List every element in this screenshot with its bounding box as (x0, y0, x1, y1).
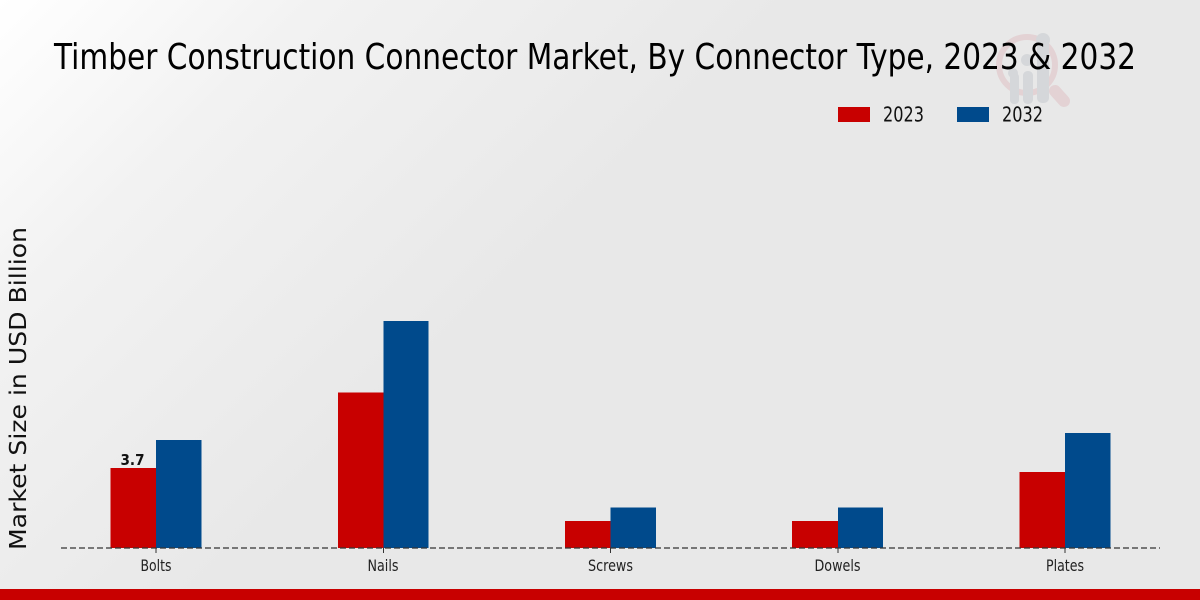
bars: Nails (338, 321, 428, 548)
x-axis labels: Screws (588, 556, 633, 575)
bars: Dowels (792, 508, 883, 548)
x-axis labels: Plates (1046, 556, 1084, 575)
legend item: 2023 (838, 102, 924, 126)
legend item: 2032: 2032 (1002, 102, 1043, 126)
x-axis labels: Nails (368, 556, 398, 575)
x-axis labels: Dowels (814, 556, 860, 575)
icon: watermark logo (999, 33, 1064, 104)
bars: Plates (1020, 433, 1110, 548)
y-axis title: Market Size in USD Billion (6, 227, 32, 550)
bars: Bolts (110, 440, 202, 548)
value label: Bolts 2023: 3.7 (120, 451, 144, 469)
footer bar (0, 589, 1200, 600)
bars: Screws (565, 508, 656, 548)
legend (838, 102, 1043, 126)
x-axis labels: Bolts (140, 556, 172, 575)
bar chart (61, 321, 1160, 575)
legend item: 2032 (957, 102, 1043, 126)
legend item: 2023: 2023 (883, 102, 924, 126)
x-axis labels (140, 556, 1084, 575)
